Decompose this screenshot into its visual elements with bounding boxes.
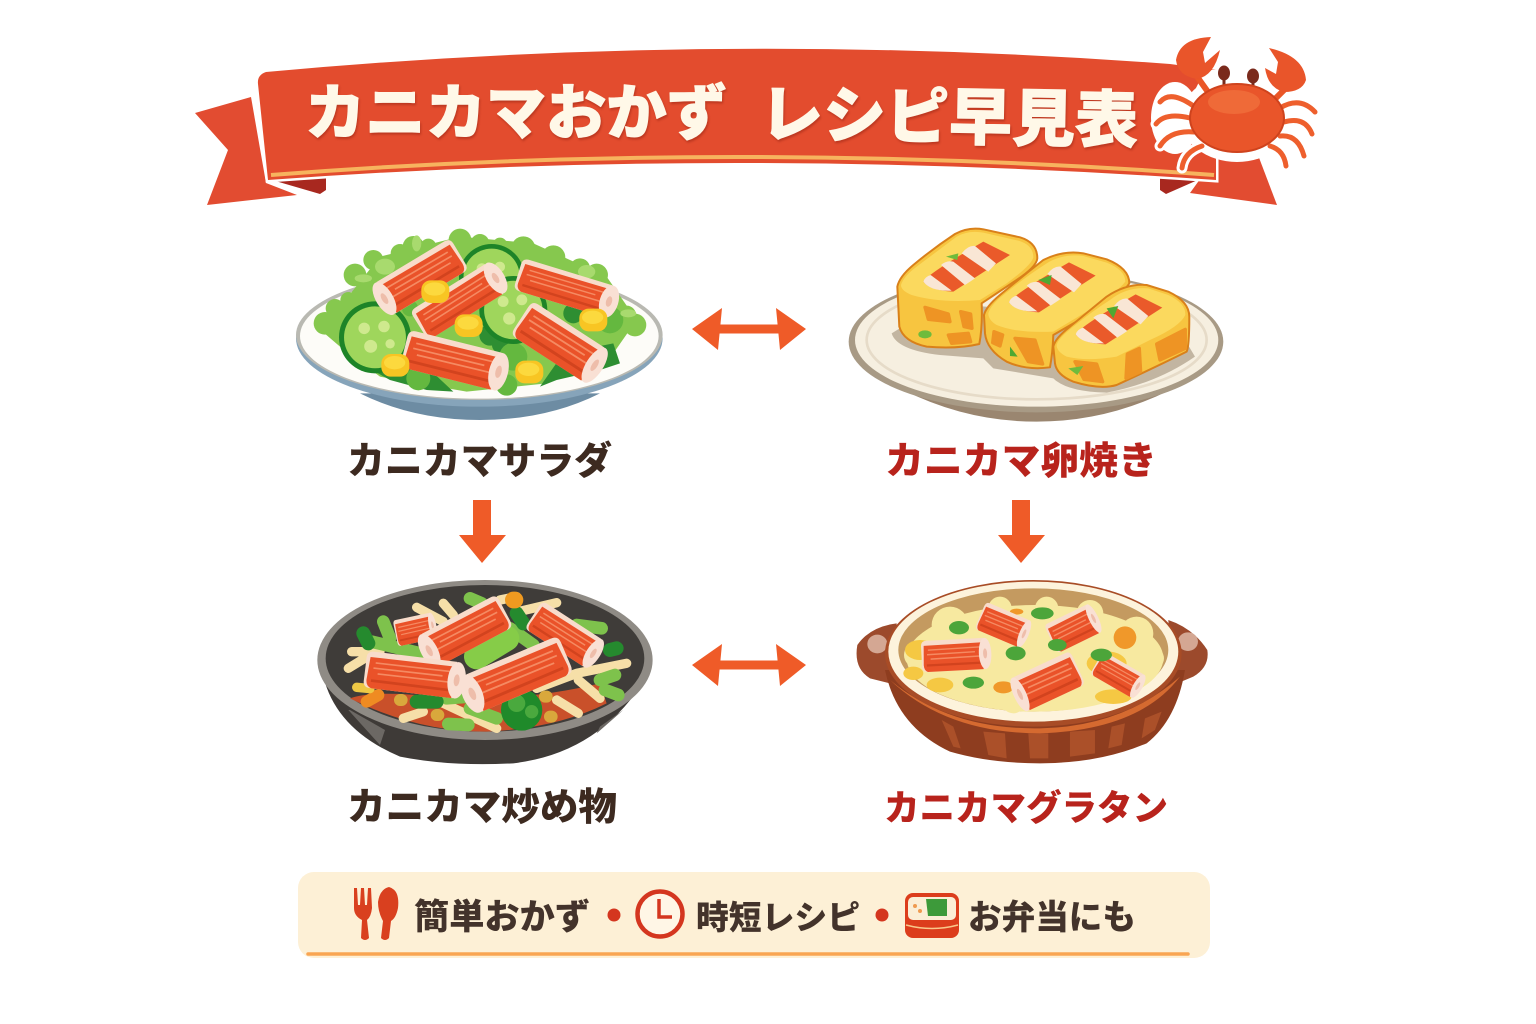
footer panel [298, 872, 1210, 958]
banner left tail [195, 97, 297, 205]
crab white halo [1151, 70, 1293, 162]
icon: clock [638, 892, 682, 936]
plate [296, 270, 663, 420]
crab sticks [921, 602, 1148, 714]
egg roll 3 [1053, 285, 1189, 387]
vegetables [348, 597, 627, 731]
label: カニカマグラタン: カニカマグラタン [884, 788, 1168, 828]
crab claws [1176, 37, 1306, 92]
title text: カニカマおかず [305, 80, 727, 147]
footer underline [308, 952, 1188, 956]
crab sticks [363, 594, 608, 716]
corn [381, 280, 607, 383]
egg roll 2 [984, 252, 1129, 368]
title text [305, 80, 1139, 156]
crab legs [1156, 97, 1315, 168]
banner folds [268, 168, 1216, 194]
pan [317, 580, 653, 764]
crab sticks [368, 238, 623, 393]
bullet [876, 908, 888, 922]
bullet [608, 908, 620, 922]
crab claw arms [1198, 78, 1284, 100]
egg roll 1 [897, 229, 1037, 348]
gratin dish [857, 580, 1208, 763]
handles [857, 620, 1208, 685]
label: カニカマサラダ: カニカマサラダ [347, 440, 612, 483]
banner right tail [1190, 155, 1277, 205]
peas [949, 607, 1112, 689]
icon: crab [1151, 37, 1315, 168]
label: カニカマ炒め物: カニカマ炒め物 [347, 787, 617, 829]
plate [849, 271, 1223, 422]
stir-fry dish [317, 580, 653, 764]
banner main band [258, 49, 1216, 180]
icon: bento box [905, 893, 959, 938]
horizontal arrow top [692, 308, 806, 350]
crab eyes [1220, 67, 1258, 90]
title text: レシピ早見表 [759, 81, 1139, 156]
banner gold stripe [271, 157, 1214, 175]
footer background [298, 872, 1210, 958]
cheese topping [903, 597, 1164, 713]
arrow down left [459, 500, 506, 563]
text: 簡単おかず: 簡単おかず [414, 898, 590, 937]
label: カニカマ卵焼き: カニカマ卵焼き [885, 441, 1157, 483]
cucumbers [339, 244, 547, 373]
dish rim [888, 582, 1178, 722]
horizontal arrow bottom [692, 644, 806, 686]
lettuce [314, 229, 646, 396]
dish inner [898, 588, 1168, 712]
icon: fork and spoon [354, 887, 398, 940]
salad dish [296, 229, 663, 420]
arrow down right [998, 500, 1045, 563]
text: 時短レシピ: 時短レシピ [696, 899, 860, 936]
text: お弁当にも: お弁当にも [968, 899, 1136, 937]
title banner [195, 49, 1277, 205]
sauce [350, 683, 607, 732]
dish body [885, 580, 1185, 763]
crab body [1190, 84, 1284, 152]
tamagoyaki dish [849, 229, 1223, 422]
